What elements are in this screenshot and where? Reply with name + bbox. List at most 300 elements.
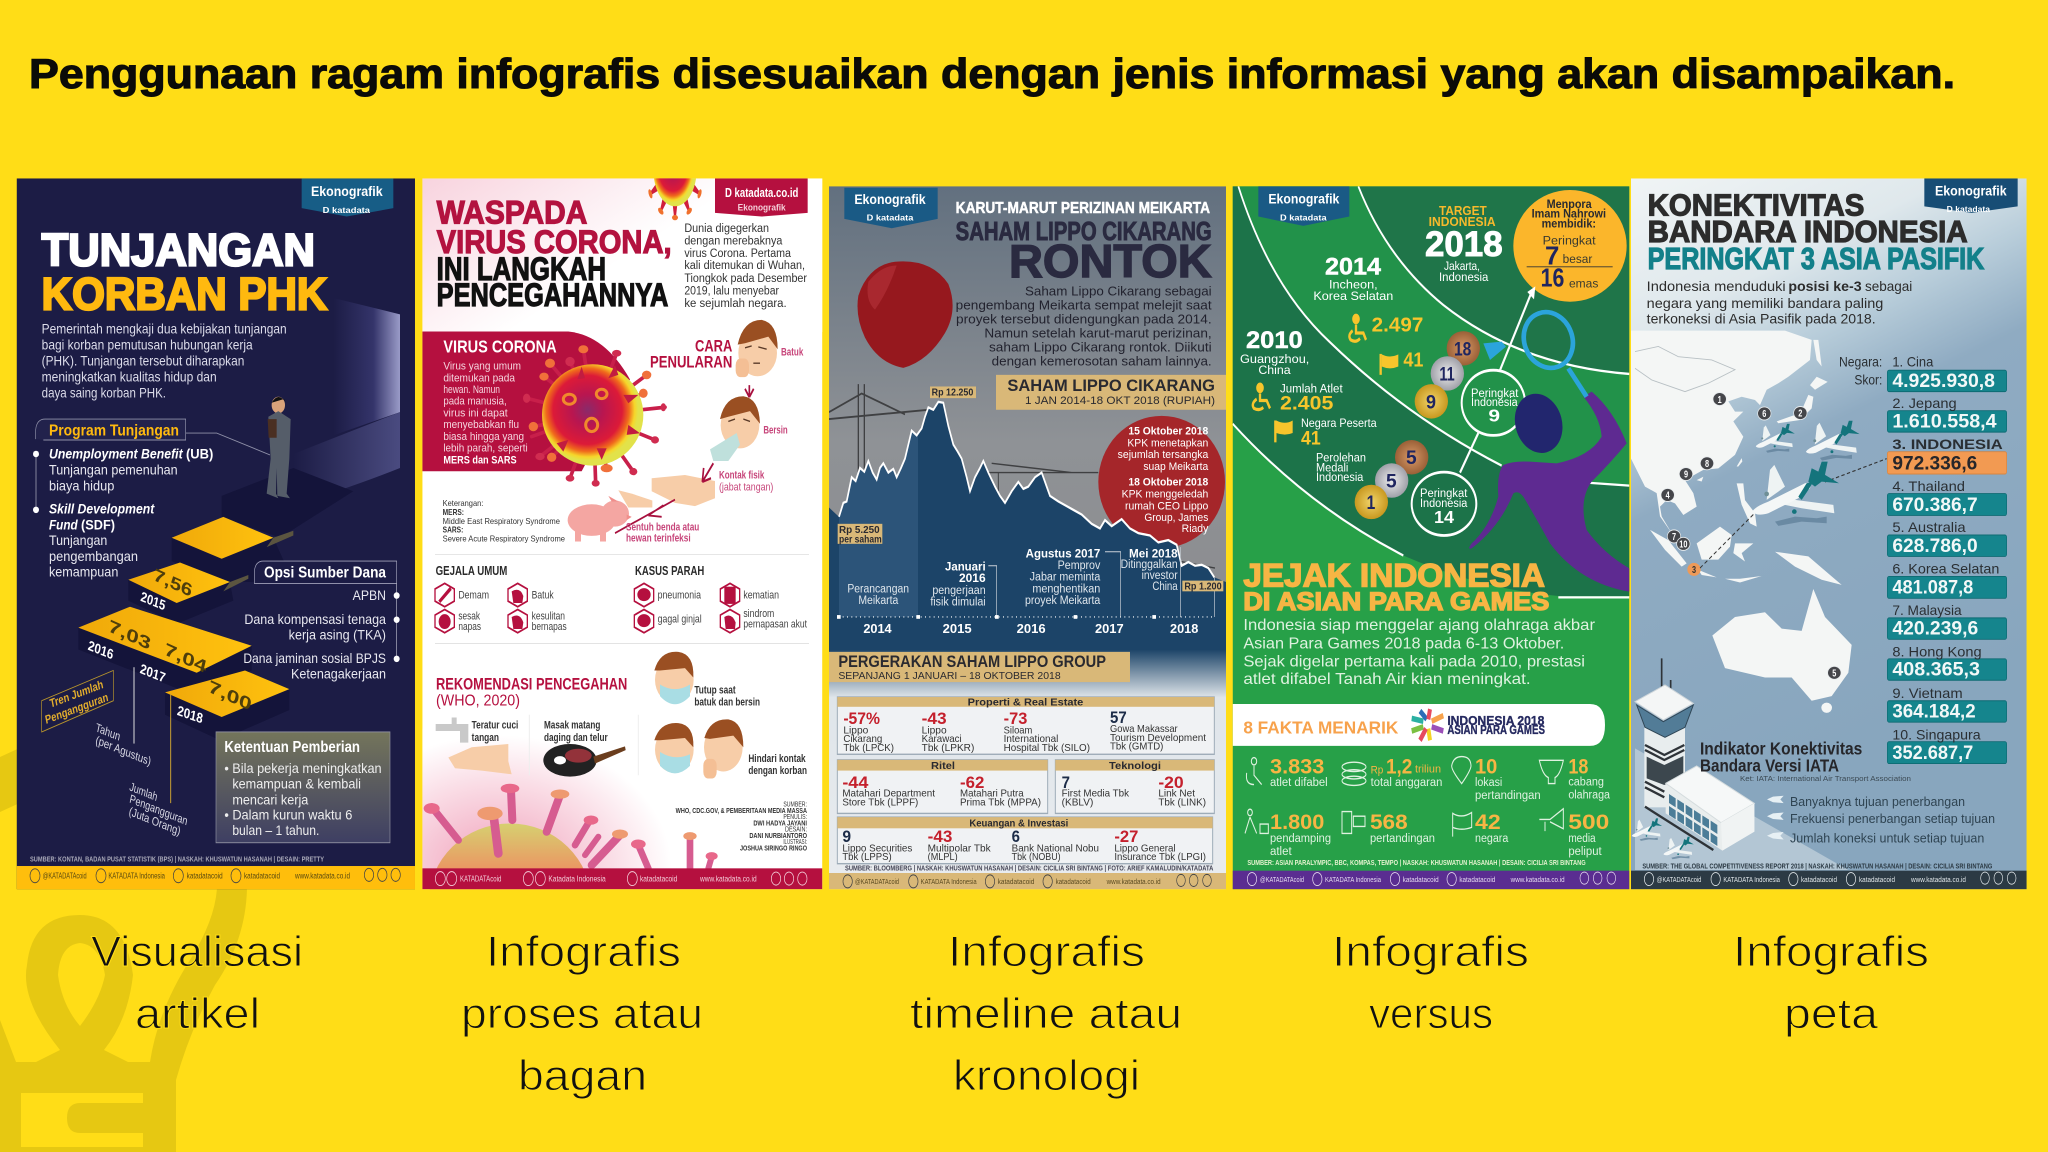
callout circle: sejumlah tersangka xyxy=(1118,449,1209,462)
virus corona block: hewan. Namun xyxy=(443,384,500,395)
intro text xyxy=(956,285,1213,369)
intro text: virus Corona. Pertama xyxy=(684,248,791,261)
stock movement section: SEPANJANG 1 JANUARI – 18 OKTOBER 2018 xyxy=(838,670,1061,681)
footer: @KATADATAcoid xyxy=(43,873,87,881)
card: keuangan: Lippo Securities xyxy=(842,842,912,854)
credits: WHO, CDC.GOV, & PEMBERITAAN MEDIA MASSA xyxy=(676,808,808,815)
year 2010: 2010 xyxy=(1246,327,1303,354)
ketentuan pemberian: kemampuan & kembali xyxy=(232,777,361,792)
chart: stair steps: 7,00 xyxy=(206,677,253,715)
rekomendasi pencegahan: dengan korban xyxy=(748,765,807,777)
year 2010: Jumlah Atlet xyxy=(1280,382,1343,396)
chart legend: tren: (Juta Orang) xyxy=(128,805,182,839)
card: teknologi: (KBLV) xyxy=(1062,796,1094,808)
target circle: besar xyxy=(1563,253,1593,267)
gejala umum: napas xyxy=(458,621,481,632)
area chart: 2014 xyxy=(863,622,893,636)
card: keuangan: 9 xyxy=(842,828,851,846)
chart: stair steps: 2017 xyxy=(139,661,167,686)
facts grid: cabang xyxy=(1568,776,1604,789)
heading: RONTOK xyxy=(1009,235,1212,287)
cara penularan: Kontak fisik xyxy=(719,469,765,481)
ranking list: 481.087,8 xyxy=(1892,576,1973,598)
gejala umum: bernapas xyxy=(532,621,567,632)
ranking list: Negara: xyxy=(1839,355,1882,370)
area chart: 2015 xyxy=(943,622,972,636)
facts banner: ASIAN PARA GAMES xyxy=(1447,724,1545,738)
program tunjangan: Program Tunjangan xyxy=(49,422,179,439)
badge: Ekonografik xyxy=(854,191,926,207)
virus corona block: menyebabkan flu xyxy=(443,419,519,430)
credits: DWI HADYA JAYANI xyxy=(753,821,807,828)
medals 2010: 1 xyxy=(1367,492,1375,514)
ranking list: 4. Thailand xyxy=(1892,480,1965,495)
badge xyxy=(1924,178,2018,214)
footer: katadatacoid xyxy=(1056,878,1091,886)
facts banner: INDONESIA 2018 xyxy=(1447,715,1544,728)
ketentuan pemberian: bulan – 1 tahun. xyxy=(232,823,319,838)
ranking list: 9. Vietnam xyxy=(1892,686,1963,701)
caption: Infografis proses atau bagan: Infografis xyxy=(486,928,681,976)
footer: katadatacoid xyxy=(1459,876,1496,884)
facts grid: triliun xyxy=(1415,763,1441,775)
card: properti: Karawaci xyxy=(922,733,962,744)
opsi sumber dana: Dana kompensasi tenaga xyxy=(244,612,387,627)
facts grid: 1.800 xyxy=(1270,809,1324,833)
program tunjangan: (UB) xyxy=(186,447,213,462)
credits: DESAIN: xyxy=(785,827,807,834)
heading: WASPADA xyxy=(437,195,587,230)
caption: Infografis proses atau bagan: proses atau xyxy=(461,990,703,1038)
callout circle: KPK menggeledah xyxy=(1122,489,1208,501)
background light bulb watermark xyxy=(0,735,247,1152)
callout circle: 15 Oktober 2018 xyxy=(1128,425,1209,438)
chart legend: tren: Pengangguran xyxy=(128,792,189,829)
facts grid: Rp xyxy=(1371,764,1383,776)
heading: DI ASIAN PARA GAMES xyxy=(1243,588,1549,616)
opsi sumber dana: Dana jaminan sosial BPJS xyxy=(243,652,386,666)
credits: JOSHUA SIRINGO RINGO xyxy=(740,846,807,853)
program tunjangan: Unemployment Benefit xyxy=(49,447,184,462)
illustration: man xyxy=(267,397,291,498)
kasus parah: pneumonia xyxy=(658,589,702,601)
area chart: Jabar meminta xyxy=(1030,571,1101,584)
card: properti: International xyxy=(1004,733,1058,744)
chart legend: tren: (per Agustus) xyxy=(94,734,152,769)
chart: stair steps: 7,04 xyxy=(162,640,209,678)
card: ritel: Ritel xyxy=(931,760,955,771)
intro text: Asian Para Games 2018 pada 6-13 Oktober. xyxy=(1243,635,1564,652)
ranking list: 6. Korea Selatan xyxy=(1892,562,1999,577)
year 2010: China xyxy=(1258,364,1291,377)
badge: Ekonografik xyxy=(311,183,383,200)
intro text: negara yang memiliki bandara paling xyxy=(1647,295,1883,311)
year 2014: 41 xyxy=(1403,348,1423,371)
ranking list: 2. Jepang xyxy=(1892,396,1957,411)
keterangan: Middle East Respiratory Syndrome xyxy=(443,516,560,526)
heading xyxy=(1648,188,1985,276)
map: pins: 4 xyxy=(1666,489,1670,501)
intro text: dengan kemerosotan saham lainnya. xyxy=(992,355,1212,369)
card: teknologi: -20 xyxy=(1158,774,1184,792)
ranking list xyxy=(1839,355,2007,764)
card: properti: Tbk (LPCK) xyxy=(843,742,894,753)
illustration: cranes xyxy=(829,384,1215,568)
chart header: SAHAM LIPPO CIKARANG xyxy=(1007,377,1215,396)
chart header xyxy=(996,375,1226,410)
caption: Infografis peta: peta xyxy=(1784,990,1878,1038)
facts grid: pertandingan xyxy=(1475,790,1541,802)
target 2018 xyxy=(1425,205,1503,284)
target circle: Menpora xyxy=(1547,199,1592,212)
card: ritel: Prima Tbk (MPPA) xyxy=(960,796,1041,808)
program tunjangan: (SDF) xyxy=(81,518,115,533)
medals 2014: 11 xyxy=(1439,363,1455,385)
card: keuangan: Tbk (NOBU) xyxy=(1012,851,1061,862)
chart legend: tren: Tahun xyxy=(94,721,122,744)
chart: stair steps: 2016 xyxy=(87,637,115,663)
heading: KARUT-MARUT PERIZINAN MEIKARTA xyxy=(956,199,1210,216)
year 2014: 2014 xyxy=(1325,254,1381,281)
area chart: Ditinggalkan xyxy=(1121,559,1178,572)
gejala umum: Batuk xyxy=(532,589,554,601)
ranking list: 972.336,6 xyxy=(1892,452,1977,474)
map: pins: 7 xyxy=(1672,531,1676,542)
intro text xyxy=(1647,278,1912,327)
caption: Infografis versus xyxy=(1332,928,1529,1038)
cara penularan: (jabat tangan) xyxy=(719,481,773,493)
target 2018: Indonesia xyxy=(1439,270,1488,284)
badge: D katadata xyxy=(867,215,914,223)
area chart: per saham xyxy=(839,533,882,545)
cara penularan: hewan terinfeksi xyxy=(626,532,691,544)
ranking list: 1.610.558,4 xyxy=(1892,410,1997,432)
indicators: Bandara Versi IATA xyxy=(1700,757,1839,776)
rank 9 circle: 9 xyxy=(1488,406,1500,426)
heading: BANDARA INDONESIA xyxy=(1648,215,1968,249)
map: pins xyxy=(1661,393,1887,679)
ketentuan pemberian xyxy=(216,732,390,843)
year 2010: 2.405 xyxy=(1280,393,1333,414)
footer: KATADATA Indonesia xyxy=(1325,876,1381,884)
map: pins: 9 xyxy=(1684,469,1688,480)
indicators: Jumlah koneksi untuk setiap tujuan xyxy=(1790,832,1984,846)
callout circle: KPK menetapkan xyxy=(1127,437,1208,450)
rank 9 circle: Peringkat xyxy=(1471,388,1519,401)
area chart: 2017 xyxy=(1095,622,1124,636)
card: teknologi xyxy=(1055,760,1214,813)
card: teknologi: Link Net xyxy=(1158,787,1196,799)
caption: Infografis proses atau bagan xyxy=(461,928,703,1100)
footer: www.katadata.co.id xyxy=(1910,876,1966,884)
opsi sumber dana: kerja asing (TKA) xyxy=(289,628,386,643)
area chart: Januari xyxy=(945,561,986,574)
intro text: ke sejumlah negara. xyxy=(684,298,787,310)
medals 2014: 18 xyxy=(1454,338,1471,360)
ranking list: 670.386,7 xyxy=(1892,494,1978,515)
badge: D katadata xyxy=(323,205,371,215)
chart legend: tren: Jumlah xyxy=(128,780,159,805)
caption: Infografis timeline atau kronologi: timeline atau xyxy=(910,990,1182,1038)
area chart xyxy=(829,386,1226,654)
heading: JEJAK INDONESIA xyxy=(1243,558,1545,595)
target circle: Peringkat xyxy=(1543,234,1596,248)
area chart: fisik dimulai xyxy=(930,596,986,609)
footer: KATADATA Indonesia xyxy=(921,878,977,886)
ketentuan pemberian: Ketentuan Pemberian xyxy=(224,738,360,755)
facts grid: media xyxy=(1568,833,1596,845)
year 2014 xyxy=(1313,254,1423,375)
facts grid: pendamping xyxy=(1270,833,1331,845)
intro text xyxy=(42,322,287,401)
kasus parah xyxy=(634,565,807,633)
card: properti: Tbk (LPKR) xyxy=(922,742,975,753)
ranking list: 7. Malaysia xyxy=(1892,604,1962,619)
facts grid: atlet difabel xyxy=(1270,777,1328,789)
cara penularan: CARA xyxy=(695,338,733,356)
intro text: Sejak digelar pertama kali pada 2010, prestasi xyxy=(1243,652,1585,670)
panel: Saham Lippo Cikarang Rontok xyxy=(829,186,1226,889)
cara penularan: Batuk xyxy=(781,346,804,358)
year 2010: Medali xyxy=(1316,461,1348,475)
caption: Infografis peta: Infografis xyxy=(1733,928,1929,976)
ranking list: 364.184,2 xyxy=(1892,700,1976,722)
ranking list: 8. Hong Kong xyxy=(1892,645,1982,660)
card: keuangan: -27 xyxy=(1114,828,1138,846)
badge xyxy=(844,188,938,228)
callout circle xyxy=(1098,416,1225,548)
panel: Jejak Indonesia di Asian Para Games xyxy=(1233,186,1629,889)
map: pins: 8 xyxy=(1705,458,1709,469)
illustration: bottom virus xyxy=(424,784,718,890)
card: properti: -43 xyxy=(922,710,947,729)
heading: VIRUS CORONA, xyxy=(437,224,672,260)
rekomendasi pencegahan xyxy=(436,652,807,778)
opsi sumber dana xyxy=(243,561,400,682)
intro text: dengan merebaknya xyxy=(684,235,783,248)
year 2010: Negara Peserta xyxy=(1301,417,1377,430)
rekomendasi pencegahan: Teratur cuci xyxy=(472,719,519,732)
card: keuangan: Multipolar Tbk xyxy=(928,842,992,854)
rekomendasi pencegahan: Hindari kontak xyxy=(748,753,806,766)
stock movement section xyxy=(829,650,1226,889)
program tunjangan: Fund xyxy=(49,518,78,533)
cara penularan xyxy=(568,320,804,544)
program tunjangan: Skill Development xyxy=(49,502,155,517)
footer: katadatacoid xyxy=(998,878,1035,886)
facts grid: negara xyxy=(1475,833,1509,845)
facts grid: 18 xyxy=(1568,754,1588,778)
intro text: Indonesia menduduki xyxy=(1647,278,1786,294)
intro text: bagi korban pemutusan hubungan kerja xyxy=(42,338,253,353)
opsi sumber dana: Opsi Sumber Dana xyxy=(264,564,387,581)
footer: katadatacoid xyxy=(244,873,280,881)
illustration: top virus xyxy=(648,178,702,220)
virus corona block: ditemukan pada xyxy=(443,372,516,384)
card: properti: Lippo xyxy=(922,724,947,736)
program tunjangan xyxy=(33,419,270,580)
illustration: player xyxy=(1469,305,1629,592)
footer xyxy=(1631,871,2027,889)
source: SUMBER: KONTAN, BADAN PUSAT STATISTIK (BPS) | NASKAH: KHUSWATUN HASANAH | DESAIN: PRETTY xyxy=(30,857,324,864)
footer xyxy=(17,866,415,889)
year 2010: 41 xyxy=(1301,427,1321,449)
target circle: membidik: xyxy=(1542,218,1596,231)
caption: Infografis timeline atau kronologi: kronologi xyxy=(953,1052,1140,1100)
heading: SAHAM LIPPO CIKARANG xyxy=(956,216,1212,246)
footer xyxy=(422,868,822,889)
card: teknologi: Tbk (LINK) xyxy=(1158,796,1206,808)
kasus parah: gagal ginjal xyxy=(658,613,702,625)
rekomendasi pencegahan: REKOMENDASI PENCEGAHAN xyxy=(436,676,627,694)
card: keuangan: -43 xyxy=(928,828,952,846)
map: pins: 2 xyxy=(1798,408,1802,419)
program tunjangan: Tunjangan pemenuhan xyxy=(49,463,178,478)
intro text: 2019, lalu menyebar xyxy=(684,285,780,298)
card: properti: Properti & Real Estate xyxy=(968,696,1083,708)
ketentuan pemberian: • Dalam kurun waktu 6 xyxy=(224,808,353,823)
indicators: Frekuensi penerbangan setiap tujuan xyxy=(1790,813,1995,827)
intro text: Dunia digegerkan xyxy=(684,223,769,235)
rank 9 circle: Indonesia xyxy=(1471,397,1518,409)
year 2010: Indonesia xyxy=(1316,471,1363,484)
indicators: Ket: IATA: International Air Transport Association xyxy=(1740,775,1911,783)
card: properti: Hospital Tbk (SILO) xyxy=(1004,742,1090,753)
card: properti: Siloam xyxy=(1004,724,1032,736)
area chart: proyek Meikarta xyxy=(1025,595,1101,607)
target circle: 7 xyxy=(1545,240,1559,270)
card: ritel: -62 xyxy=(960,774,984,792)
illustration: planes xyxy=(1752,421,1860,526)
heading xyxy=(41,232,330,312)
ketentuan pemberian: • Bila pekerja meningkatkan xyxy=(224,761,382,776)
rank 9 circle xyxy=(1460,286,1535,473)
heading: KONEKTIVITAS xyxy=(1648,188,1864,223)
badge: Ekonografik xyxy=(738,202,786,213)
virus corona block: biasa hingga yang xyxy=(443,431,524,442)
callout circle: Group, James xyxy=(1144,512,1208,524)
card: keuangan: Keuangan & Investasi xyxy=(969,817,1068,829)
card: teknologi: Teknologi xyxy=(1109,760,1161,771)
year 2010 xyxy=(1240,327,1377,484)
kasus parah: kematian xyxy=(743,589,779,601)
rekomendasi pencegahan: Tutup saat xyxy=(694,685,736,697)
caption: Infografis versus: versus xyxy=(1369,990,1493,1038)
gejala umum: GEJALA UMUM xyxy=(436,565,507,578)
badge: D katadata xyxy=(1947,206,1990,214)
intro text: sebagai xyxy=(1865,278,1912,294)
facts grid: 10 xyxy=(1475,754,1497,778)
gejala umum xyxy=(435,565,567,633)
area chart: Meikarta xyxy=(858,595,899,607)
caption: Visualisasi artikel xyxy=(91,928,303,1038)
card: properti: Cikarang xyxy=(843,733,883,744)
rekomendasi pencegahan: Masak matang xyxy=(544,719,600,732)
stock movement section: PERGERAKAN SAHAM LIPPO GROUP xyxy=(838,653,1106,672)
badge: D katadata xyxy=(1280,215,1327,223)
area chart: Agustus 2017 xyxy=(1026,548,1101,561)
map: pins: 6 xyxy=(1762,408,1766,420)
card: keuangan: (MLPL) xyxy=(928,851,958,862)
intro text: (PHK). Tunjangan tersebut diharapkan xyxy=(42,354,244,369)
facts grid: atlet xyxy=(1270,846,1292,858)
ranking list: 5. Australia xyxy=(1892,521,1966,536)
area chart: 2018 xyxy=(1170,622,1198,636)
facts grid: olahraga xyxy=(1568,789,1610,802)
intro text: posisi ke-3 xyxy=(1788,278,1862,294)
footer: @KATADATAcoid xyxy=(855,878,899,886)
ranking list: 408.365,3 xyxy=(1892,658,1980,680)
source: SUMBER: THE GLOBAL COMPETITIVENESS REPORT 2018 | NASKAH: KHUSWATUN HASANAH | DESAIN: CICILIA SRI BINTANG xyxy=(1642,864,1993,871)
intro text: meningkatkan kualitas hidup dan xyxy=(42,370,217,385)
callout circle: suap Meikarta xyxy=(1143,461,1209,473)
illustration: airport xyxy=(1632,658,1848,870)
intro text: pengembang Meikarta sempat melejit saat xyxy=(956,299,1213,313)
credits: ILUSTRASI: xyxy=(783,840,807,846)
medals 2010 xyxy=(1355,440,1428,519)
target circle: Imam Nahrowi xyxy=(1532,208,1606,221)
intro text: proyek tersebut didengungkan pada 2014. xyxy=(956,313,1212,327)
gejala umum: kesulitan xyxy=(532,611,565,622)
caption: Infografis peta xyxy=(1733,928,1929,1038)
card: properti: Gowa Makassar xyxy=(1110,723,1178,734)
caption: Infografis proses atau bagan: bagan xyxy=(518,1052,647,1100)
medals 2010: 5 xyxy=(1386,470,1397,492)
footer: KATADATA Indonesia xyxy=(108,873,165,881)
card: ritel: Matahari Putra xyxy=(960,787,1024,799)
rank 14 circle: 14 xyxy=(1434,508,1455,527)
source: SUMBER: ASIAN PARALYMPIC, BBC, KOMPAS, TEMPO | NASKAH: KHUSWATUN HASANAH | DESAIN: CICILIA SRI BINTANG xyxy=(1247,860,1586,867)
intro text xyxy=(684,223,808,310)
footer: www.katadata.co.id xyxy=(294,873,350,881)
intro text: Saham Lippo Cikarang sebagai xyxy=(1025,285,1212,299)
intro text: atlet difabel Tanah Air kian meningkat. xyxy=(1243,670,1531,687)
heading xyxy=(437,195,672,313)
intro text: Tiongkok pada Desember xyxy=(684,273,808,286)
card: properti xyxy=(837,696,1214,754)
card: teknologi: 7 xyxy=(1062,774,1070,792)
facts banner: 8 FAKTA MENARIK xyxy=(1243,718,1399,738)
facts grid: total anggaran xyxy=(1371,777,1442,789)
card: properti: Tourism Development xyxy=(1110,732,1207,743)
year 2010: Guangzhou, xyxy=(1240,353,1309,367)
program tunjangan: Tunjangan xyxy=(49,534,107,549)
track bands xyxy=(1233,186,1629,597)
map: pins: 10 xyxy=(1679,538,1687,550)
badge xyxy=(1258,186,1349,226)
virus corona block xyxy=(422,332,666,487)
footer: katadatacoid xyxy=(187,873,223,881)
badge: D katadata.co.id xyxy=(725,187,798,200)
callout circle: Riady xyxy=(1182,523,1208,536)
card: ritel: Matahari Department xyxy=(842,787,936,799)
card: keuangan: 6 xyxy=(1012,828,1020,846)
indicators: Indikator Konektivitas xyxy=(1700,739,1862,759)
area chart: Pemprov xyxy=(1058,560,1101,572)
intro text xyxy=(1243,616,1596,687)
intro text: kali ditemukan di Wuhan, xyxy=(684,260,805,273)
card: properti: -57% xyxy=(843,710,880,729)
caption: Infografis timeline atau kronologi xyxy=(910,928,1182,1100)
heading xyxy=(1243,558,1549,616)
area chart: pengerjaan xyxy=(932,585,986,598)
ketentuan pemberian: mencari kerja xyxy=(232,793,309,808)
card: keuangan: Insurance Tbk (LPGI) xyxy=(1114,851,1206,862)
program tunjangan: biaya hidup xyxy=(49,479,115,494)
badge xyxy=(302,178,393,217)
credits: PENULIS: xyxy=(783,814,807,821)
year 2014: Korea Selatan xyxy=(1313,290,1394,303)
